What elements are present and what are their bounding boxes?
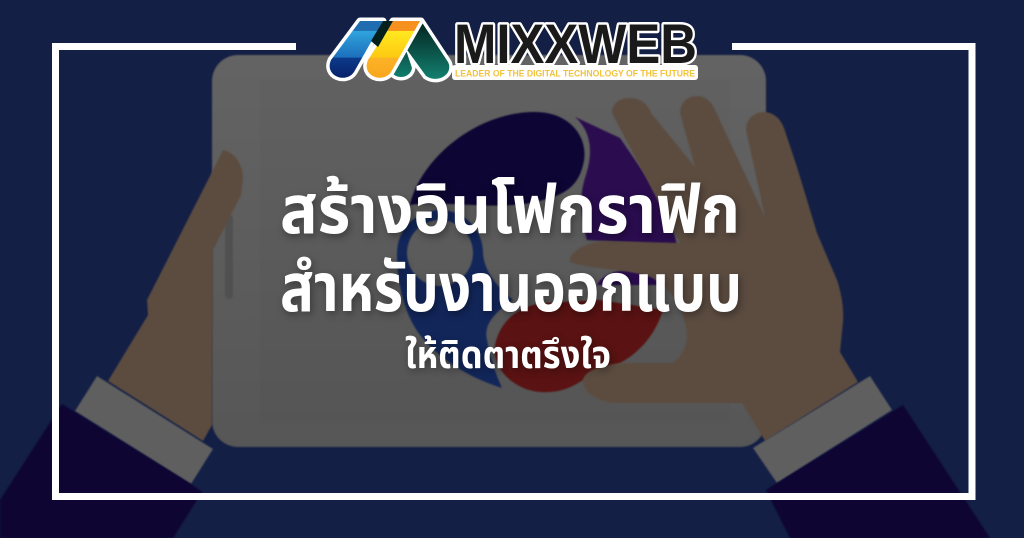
white frame <box>56 46 972 496</box>
tablet illustration <box>212 55 766 447</box>
swirl: blue segment <box>397 210 513 388</box>
logo wordmark: MIXXWEB <box>454 12 697 75</box>
left sleeve <box>0 404 202 538</box>
logo tagline <box>452 65 698 80</box>
logo mark: green stroke <box>390 21 449 79</box>
logo mark: yellow stroke <box>367 21 420 78</box>
swirl: navy segment <box>410 112 584 206</box>
right hand <box>570 96 858 441</box>
logo mark <box>330 21 449 79</box>
swirl logo on tablet <box>397 112 677 392</box>
left cuff <box>75 376 213 484</box>
title line 1: สร้างอินโฟกราฟิก <box>280 172 740 248</box>
subtitle: ให้ติดตาตรึงใจ <box>405 335 611 377</box>
right cuff <box>753 376 892 483</box>
logo mark: dark link <box>371 21 393 47</box>
right sleeve <box>766 405 990 538</box>
swirl: purple segment <box>575 117 677 245</box>
logo mark: blue stroke <box>330 21 383 78</box>
logo tagline: LEADER OF THE DIGITAL TECHNOLOGY OF THE FUTURE <box>455 68 695 80</box>
swirl: red segment <box>495 300 663 392</box>
brand logo <box>330 12 698 80</box>
swirl: small purple arc <box>597 270 660 285</box>
title line 2: สำหรับงานออกแบบ <box>280 250 742 326</box>
left hand <box>108 150 243 441</box>
